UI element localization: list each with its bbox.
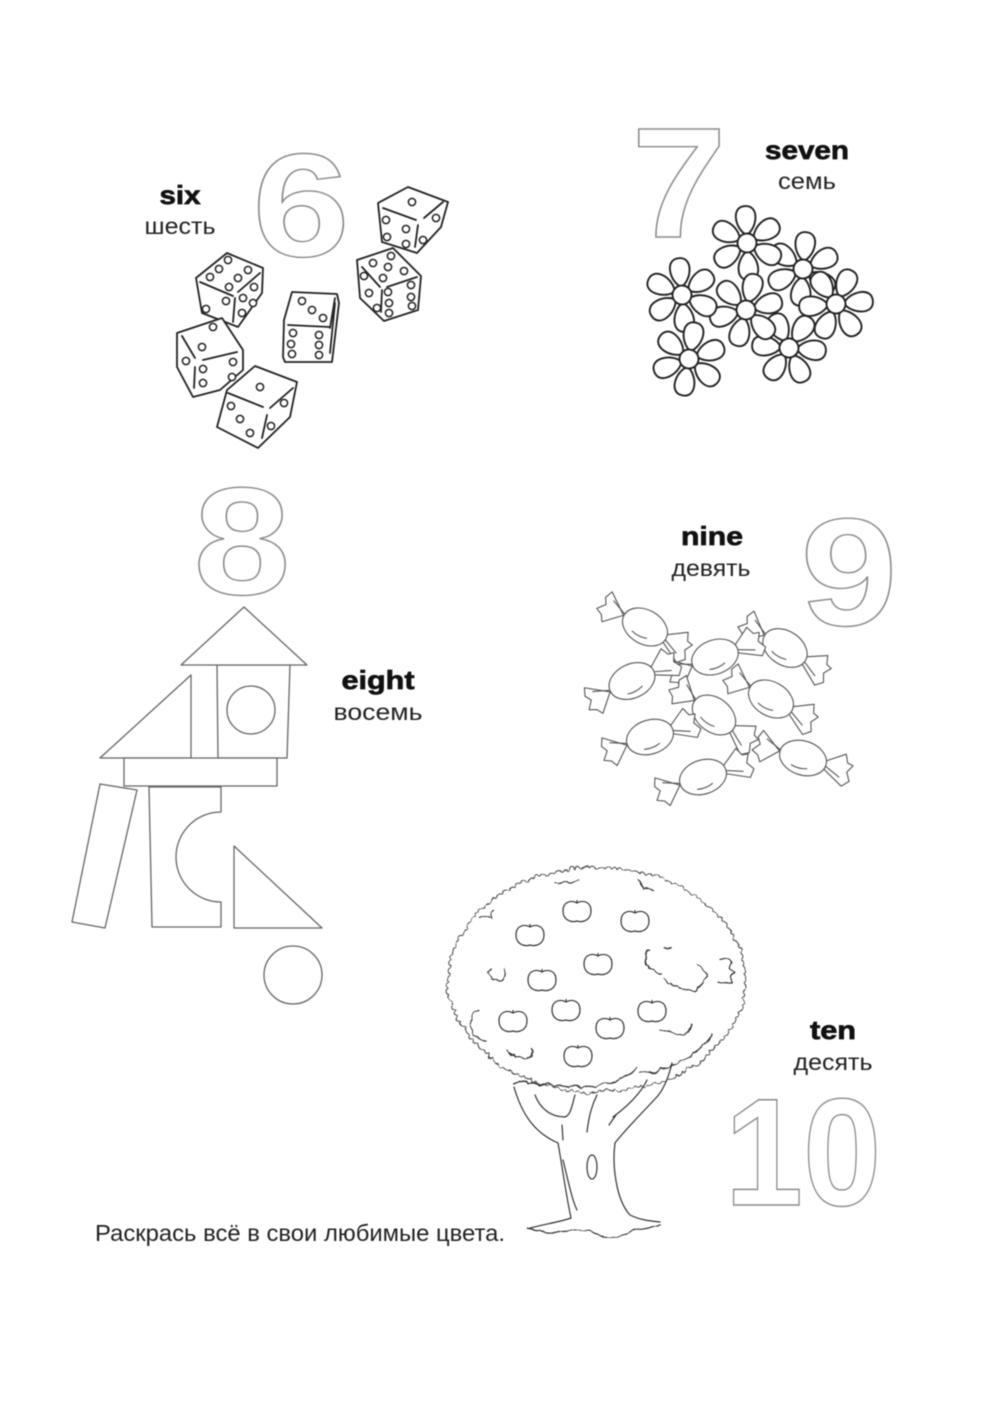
die: lower left xyxy=(177,318,243,397)
icon: apple tree xyxy=(450,869,744,1237)
tree trunk xyxy=(514,1063,672,1228)
label: six: six xyxy=(160,180,201,210)
die: bottom xyxy=(217,366,297,448)
label: шесть: шесть xyxy=(144,213,216,239)
die: middle xyxy=(283,292,339,362)
tree roots xyxy=(527,1224,660,1237)
label: ten: ten xyxy=(810,1015,856,1045)
label: десять: десять xyxy=(794,1049,873,1075)
panel: seven xyxy=(631,95,885,402)
icon: nine candies xyxy=(579,587,857,809)
label: nine: nine xyxy=(681,521,743,551)
leaf clusters xyxy=(470,880,734,1088)
label: восемь: восемь xyxy=(334,699,423,725)
label: eight: eight xyxy=(342,665,415,695)
numeral 6: 6 xyxy=(252,124,350,288)
label: семь: семь xyxy=(778,168,836,194)
tree crown xyxy=(450,869,744,1091)
numeral 10: 10 xyxy=(725,1068,881,1238)
die: top right xyxy=(378,187,448,253)
numeral 8: 8 xyxy=(193,455,291,627)
icon: seven flowers xyxy=(642,204,885,402)
numeral 9: 9 xyxy=(800,486,898,658)
label: seven: seven xyxy=(765,135,849,165)
caption: Раскрась всё в свои любимые цвета. xyxy=(95,1220,505,1246)
panel: six xyxy=(144,124,448,448)
numeral 7: 7 xyxy=(631,95,727,270)
die: upper left xyxy=(196,253,263,327)
label: девять: девять xyxy=(672,555,751,581)
icon: six dice xyxy=(177,187,448,448)
panel: eight xyxy=(72,455,423,1004)
icon: building blocks xyxy=(72,607,322,1004)
panel: nine xyxy=(579,486,898,809)
panel: ten xyxy=(450,869,881,1238)
die: right middle xyxy=(357,248,421,321)
apples xyxy=(499,900,666,1067)
